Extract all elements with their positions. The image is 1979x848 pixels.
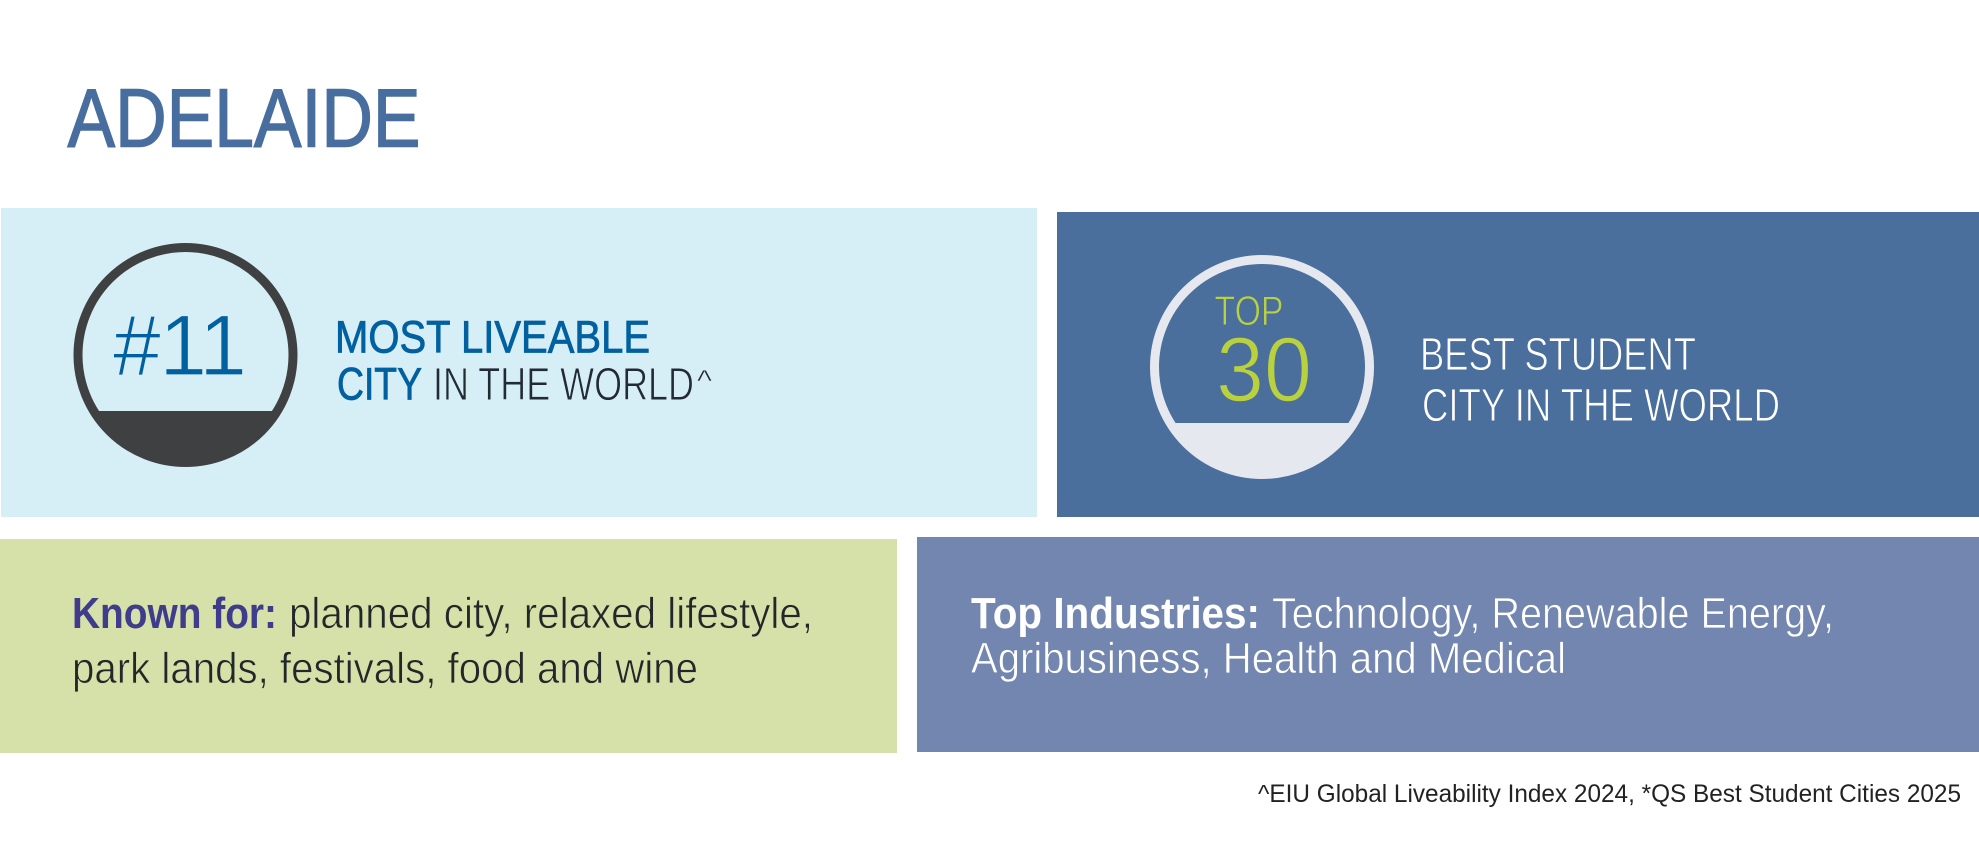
label: city: CITY	[337, 358, 422, 410]
panel: most liveable city	[1, 208, 1037, 517]
label: city in the world: CITY IN THE WORLD	[1422, 379, 1780, 431]
text: known for second line: park lands, festivals, food and wine	[72, 644, 698, 693]
panel: top industries	[917, 537, 1979, 752]
rank number: 30	[1216, 319, 1312, 421]
panel: known for	[0, 539, 897, 753]
text: industries second line: Agribusiness, Health and Medical	[971, 634, 1566, 683]
label: in the world: IN THE WORLD	[433, 358, 694, 410]
text: known for first line: planned city, relaxed lifestyle,	[289, 589, 813, 638]
title: ADELAIDE	[68, 72, 420, 164]
label: best student: BEST STUDENT	[1420, 328, 1696, 380]
footnote: sources: ^EIU Global Liveability Index 2024, *QS Best Student Cities 2025	[1258, 780, 1961, 808]
text: industries first line: Technology, Renewable Energy,	[1272, 589, 1834, 638]
top label: TOP	[1214, 287, 1284, 334]
label: most liveable: MOST LIVEABLE	[335, 312, 650, 362]
heading: top industries: Top Industries:	[971, 589, 1260, 638]
rank number: #11	[113, 298, 247, 394]
icon: dark ring badge	[78, 248, 293, 462]
heading: known for: Known for:	[72, 589, 277, 638]
icon: light ring badge	[1154, 260, 1370, 474]
footnote marker: ^	[697, 365, 712, 398]
panel: best student city	[1057, 212, 1979, 517]
